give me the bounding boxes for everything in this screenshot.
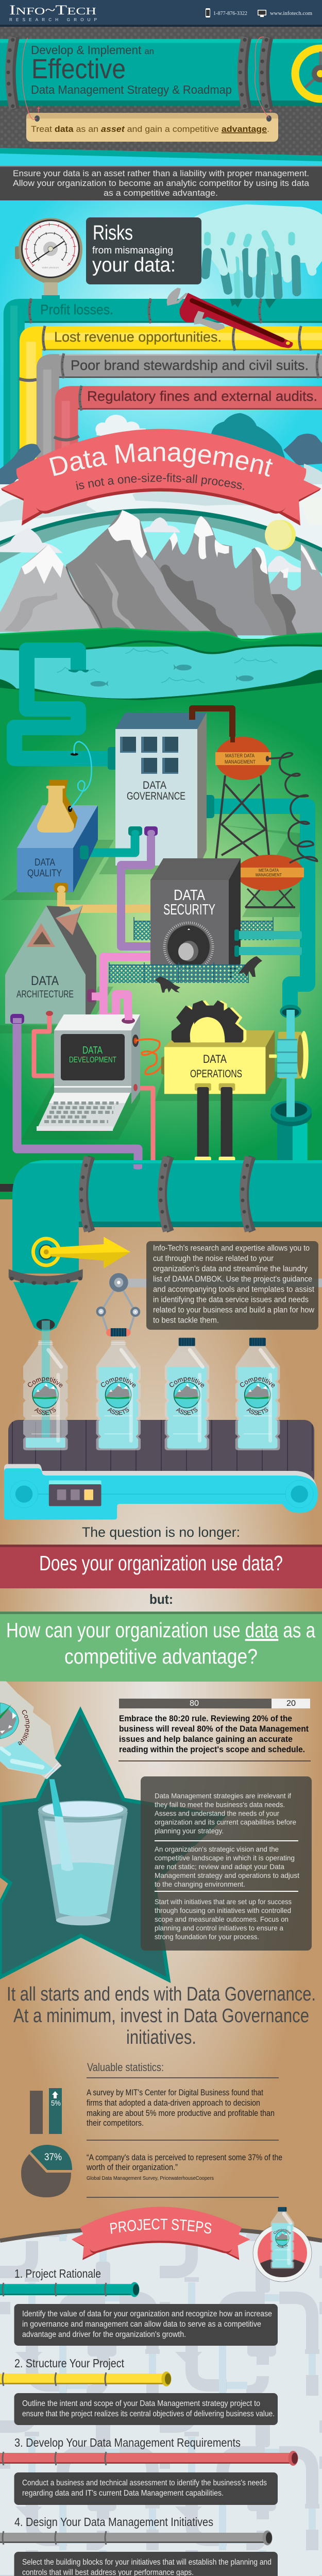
connectors: governance [128, 826, 158, 836]
label: data architecture: ARCHITECTURE [16, 989, 74, 1000]
sign text: Treat data as an asset and gain a competitive advantage. [31, 124, 269, 134]
step 1 box: Identify the value of data for your organization and recognize how an increase [22, 2310, 272, 2318]
bottle 3 label text: ASSETS [176, 1408, 198, 1415]
bar chart: 5 percent [30, 2088, 62, 2134]
gauge label: water pressure [42, 266, 59, 269]
fence: left [134, 917, 150, 940]
label: data operations: DATA [203, 1053, 227, 1065]
step 3 [0, 2436, 298, 2505]
label: data development: DATA [82, 1045, 103, 1056]
statistic: quote text [86, 2153, 282, 2181]
panel: strategy guidance: Start with initiatives that are set up for success [155, 1897, 292, 1906]
title: effective: Effective [31, 54, 126, 84]
panel: strategy guidance: to the changing environment. [155, 1880, 245, 1888]
statistics heading: Valuable statistics: [87, 2061, 164, 2074]
port: orange [132, 1035, 139, 1047]
panel: research text: and accompanying tools and templates to assist [153, 1285, 315, 1294]
step 1 box: advantage and driver for the organization's growth. [22, 2330, 186, 2339]
phone number: 1-877-876-3322 [213, 10, 247, 16]
bottle 3 label text: Competitive [170, 1377, 204, 1387]
panel: strategy guidance: scope and measurable outcomes. Focus on [155, 1915, 289, 1923]
computer: data development [37, 1012, 140, 1131]
star backdrop [0, 1710, 224, 1980]
bottle 3 label text [170, 1377, 204, 1415]
label: data security: DATA [174, 887, 206, 904]
panel: risks sky [0, 200, 322, 551]
connector: quality [80, 845, 89, 859]
block: data quality [17, 779, 98, 893]
pie chart: 37 percent: 37% [44, 2152, 62, 2163]
risk text: regulatory: Regulatory fines and external audits. [87, 388, 317, 404]
shadow tower [199, 795, 214, 818]
panel: research text: list of DAMA DMBOK. Use the project's guidance [153, 1275, 312, 1283]
step 4 pipe [0, 2531, 272, 2545]
pipe: pink to architecture [92, 992, 106, 1001]
port: salmon [133, 1084, 138, 1091]
panel: research text: organization's data and streamline the laundry [153, 1264, 308, 1273]
sign wires [22, 37, 273, 120]
bottle 2 label text: ASSETS [107, 1408, 129, 1415]
lake [0, 646, 322, 700]
medallion: bottle [252, 2207, 312, 2282]
connector: salmon [46, 1011, 53, 1016]
label: data governance: DATA [143, 779, 166, 791]
icon: guard dog right [238, 956, 262, 977]
sky clouds [0, 489, 322, 526]
banner label: PROJECT STEPS [110, 2218, 211, 2234]
pipe: yellow [19, 326, 322, 479]
risk pipes [4, 298, 322, 479]
pipe: teal [4, 298, 322, 479]
panel: strategy guidance: Assess and understand the needs of your [155, 1809, 279, 1818]
title: develop and implement: Develop & Implement an [31, 43, 154, 57]
water tower: meta data management [236, 855, 304, 907]
safe: data security [150, 858, 241, 981]
water outlet [69, 669, 89, 672]
pipes: teal outlets [234, 929, 302, 957]
80/20 rule text [119, 1714, 309, 1754]
icon: up arrow [52, 2091, 58, 2098]
step 2 box: Outline the intent and scope of your Data Management strategy project to [22, 2399, 260, 2408]
banner: data management [1, 429, 321, 526]
step 2 box [14, 2393, 278, 2425]
pipe: teal main to governance [14, 650, 109, 758]
label: data security [163, 887, 215, 918]
label: meta data management [256, 868, 282, 877]
panel: strategy guidance: organization and its current capabilities before [155, 1818, 296, 1826]
panel: strategy guidance: Management strategy and operations to adjust [155, 1871, 299, 1879]
statistic: quote text: Global Data Management Survey, PricewaterhouseCoopers [87, 2176, 214, 2181]
panel: research text: in identifying the data service issues and needs [153, 1295, 309, 1304]
intro text: Ensure your data is an asset rather than a liability with proper management. [13, 168, 309, 178]
coiled hose [266, 753, 317, 863]
statistic: survey text: A survey by MIT's Center for Digital Business found that [87, 2088, 263, 2097]
left ground strip [0, 1184, 15, 1192]
fence: right [241, 917, 273, 940]
icon: monitor [258, 10, 266, 17]
statistic: survey text: their competitors. [87, 2118, 144, 2128]
green land background [0, 639, 322, 1200]
step 1 heading: 1. Project Rationale [14, 2267, 101, 2280]
bottle 4: capped [235, 1337, 280, 1450]
upper land strip [0, 628, 322, 653]
80/20 rule text: issues and help balance gaining an accurate [119, 1734, 293, 1744]
icon: pressure gauge [15, 218, 82, 299]
panel: strategy guidance: An organization's strategic vision and the [155, 1845, 279, 1853]
label text on bottle: Competitive [18, 1710, 30, 1745]
step 1 pipe [0, 2282, 139, 2297]
panel: research text [146, 1241, 318, 1330]
step 1 box: in governance and management can allow data to serve as a competitive [22, 2320, 261, 2329]
intro text: Allow your organization to become an analytic competitor by using its data [13, 178, 310, 188]
icon: yellow valve wheel [295, 48, 322, 99]
panel: project steps background [0, 2227, 322, 2576]
panel: risks heading: your data: [92, 254, 176, 276]
dome and sky [0, 509, 322, 639]
pipe: teal to tower and right [206, 806, 308, 1007]
banner headline: Data Management [49, 443, 273, 477]
label: meta data management: META DATA [259, 868, 279, 873]
gear [172, 1001, 246, 1042]
pipe: pink patch [92, 992, 104, 1001]
icon: flask [37, 779, 78, 833]
purple pipe end [133, 1164, 142, 1170]
step 4 box: Select the building blocks for your initiatives that will establish the planning and [22, 2558, 272, 2567]
intro panel [0, 166, 322, 200]
panel: strategy guidance: are not static; review and adapt your Data [155, 1862, 284, 1871]
fence: front [109, 962, 248, 983]
title pipe shapes [0, 37, 322, 109]
valve stack [269, 1005, 312, 1175]
banner body [16, 429, 306, 512]
bottle 1 label text: ASSETS [34, 1408, 56, 1415]
label: master data management [225, 753, 256, 765]
medallion label text: ASSETS [277, 2244, 287, 2248]
risk text: profit losses: Profit losses. [40, 302, 113, 317]
water tower: master data management [215, 726, 271, 860]
panel: red question [0, 1545, 322, 1588]
step 3 box [14, 2472, 278, 2505]
pipe: brown to tower [192, 708, 232, 737]
statistic: survey text: making are about 5% more productive and profitable than [87, 2108, 275, 2118]
step 3 pipe [0, 2451, 298, 2466]
bottle 3: capped [165, 1337, 209, 1450]
panel: risks heading: Risks [93, 222, 133, 244]
label: data operations: OPERATIONS [190, 1068, 242, 1080]
storage tank pipe [12, 1157, 322, 1274]
water wedge [0, 148, 322, 166]
icon: phone [206, 8, 210, 18]
water splash [194, 205, 322, 305]
80/20 bar: 20 [286, 1699, 296, 1708]
step 2 pipe [0, 2371, 171, 2386]
icon: pouring bottle [0, 1681, 62, 1780]
label: data quality: QUALITY [27, 868, 62, 879]
question lead-in: The question is no longer: [82, 1524, 240, 1540]
machine: data operations [161, 1001, 275, 1165]
80/20 rule text: reading within the project's scope and schedule. [119, 1744, 305, 1754]
step 3 box: Conduct a business and technical assessment to identify the business's needs [22, 2479, 267, 2487]
banner: project steps [71, 2207, 250, 2260]
intro text: as a competitive advantage. [104, 188, 218, 198]
panel: strategy guidance: strong foundation for your process. [155, 1933, 259, 1941]
bottle 1: filling [23, 1320, 68, 1450]
statistic: survey text: firms that adopted a data-driven approach to decision [87, 2098, 260, 2108]
title: strategy and roadmap: Data Management Strategy & Roadmap [31, 83, 232, 96]
logo: RESEARCH GROUP [9, 18, 97, 22]
80/20 rule text: Embrace the 80:20 rule. Reviewing 20% of the [119, 1714, 292, 1723]
pipe: red [54, 386, 322, 479]
label: data operations [190, 1053, 242, 1080]
pipe: salmon right [135, 1088, 153, 1161]
bottle 4 label text: Competitive [240, 1377, 275, 1387]
port: pink [122, 1012, 135, 1024]
bottle 2 label text: Competitive [101, 1377, 136, 1387]
panel: strategy guidance [141, 1776, 312, 1951]
building: data governance [115, 713, 207, 871]
pipe: gray [37, 353, 322, 479]
bottle 2: filled [96, 1341, 141, 1450]
step 3 box: regarding data and IT's current Data Management capabilities. [22, 2489, 224, 2498]
clouds behind banner [0, 413, 322, 484]
intro text [13, 168, 310, 198]
website: www.infotech.com [270, 10, 312, 16]
bottle 2 label text [101, 1377, 136, 1415]
icon: guard dog left [155, 976, 180, 993]
connector: pink [87, 989, 95, 1002]
safe dial [164, 923, 213, 971]
bottle 4 label text [240, 1377, 275, 1415]
tan background [0, 1199, 322, 2240]
connector: quality bottom [54, 883, 68, 893]
pipe: purple long [17, 1018, 138, 1168]
panel: risks heading: from mismanaging [92, 245, 173, 256]
panel: research text: to best tackle them. [153, 1316, 219, 1325]
data governance statement [7, 1984, 316, 2048]
panel: strategy guidance: competitive landscape in which it is operating [155, 1854, 295, 1862]
ground shadows [0, 824, 314, 1140]
step 2 [0, 2357, 278, 2425]
panel: strategy guidance: Data Management strategies are irrelevant if [155, 1792, 291, 1800]
step 4 [0, 2515, 278, 2576]
bottle 4 label text: ASSETS [246, 1408, 268, 1415]
panel: research text: related to your business and build a plan for how [153, 1306, 315, 1314]
medallion label text [274, 2229, 291, 2248]
step 4 box [14, 2552, 278, 2576]
header bar [0, 0, 322, 27]
label: data architecture [16, 974, 74, 1000]
panel: green question [0, 1612, 322, 1682]
pipe: salmon left [34, 1014, 56, 1076]
label: master data management: MANAGEMENT [225, 759, 256, 765]
banner subline: is not a one-size-fits-all process. [76, 473, 244, 490]
panel: bottling line [4, 1236, 322, 1520]
panel: data management plant [0, 650, 317, 1175]
step 2 heading: 2. Structure Your Project [14, 2357, 125, 2370]
logo: INFO ~T ECH [9, 3, 96, 18]
panel: green question: competitive advantage? [64, 1645, 258, 1668]
label: data quality: DATA [35, 857, 55, 868]
connector: purple [10, 1014, 24, 1024]
filling nozzle [9, 1269, 83, 1331]
step 1 box [14, 2304, 278, 2346]
label: data development: DEVELOPMENT [69, 1056, 116, 1064]
panel: mountain landscape [0, 489, 322, 1200]
label: data governance [127, 779, 185, 802]
label: data development [69, 1045, 116, 1064]
label: data security: SECURITY [163, 902, 215, 918]
panel: risks heading [86, 217, 201, 284]
step 3 heading: 3. Develop Your Data Management Requirements [14, 2436, 241, 2449]
pipe: tan [61, 889, 155, 909]
step 2 box: ensure that the project realizes its central objectives of delivering business value. [22, 2410, 275, 2418]
icon: glass of water [38, 1779, 128, 1925]
label: data quality [27, 857, 62, 879]
pipe: purple to governance [121, 832, 155, 946]
icon: pipe wrench [167, 287, 293, 348]
bottle 1 label text [28, 1377, 63, 1415]
conveyor machine [4, 1464, 318, 1519]
label: master data management: MASTER DATA [225, 753, 255, 759]
pipe: pink [104, 957, 155, 1018]
conveyor belt [8, 1420, 314, 1487]
data governance statement: initiatives. [126, 2027, 196, 2048]
wire: orange [135, 1039, 162, 1074]
panel: research text: Info-Tech's research and expertise allows you to [153, 1244, 310, 1252]
bar chart: 5 percent: 5% [51, 2099, 61, 2108]
tank flanges [82, 1157, 252, 1231]
keyboard keys [44, 1103, 118, 1122]
80/20 rule text: business will reveal 80% of the Data Management [119, 1724, 309, 1734]
label: data governance: GOVERNANCE [127, 790, 185, 802]
panel: green question: How can your organization use data as a [6, 1618, 315, 1642]
mountains [0, 510, 322, 637]
step 4 heading: 4. Design Your Data Management Initiatives [14, 2515, 213, 2529]
statistic: survey text [87, 2088, 275, 2128]
statistic: quote text: worth of their organization.” [86, 2162, 178, 2172]
label: meta data management: MANAGEMENT [256, 872, 282, 877]
panel: strategy guidance: planning your strategy. [155, 1827, 224, 1835]
bottle 1 label text: Competitive [28, 1377, 63, 1387]
statistic: quote text: “A company's data is perceived to represent some 37% of the [87, 2153, 282, 2162]
hanging sign [26, 113, 278, 142]
label: data architecture: DATA [31, 974, 59, 988]
panel: strategy guidance: planning and control initiatives to ensure a [155, 1924, 283, 1932]
risk text: lost revenue: Lost revenue opportunities. [54, 329, 222, 345]
banner tails [1, 479, 321, 526]
connector: teal [108, 747, 117, 770]
icon: yellow arrow valve [31, 1237, 130, 1268]
wire: cyan [70, 741, 92, 809]
building: data architecture [5, 905, 96, 1024]
robot arm [96, 1273, 322, 1336]
80/20 bar: 80 [190, 1699, 199, 1708]
panel: strategy guidance: they fail to meet the business's data needs. [155, 1801, 285, 1809]
panel: strategy guidance: through focusing on initiatives with controlled [155, 1906, 291, 1914]
hero band: title pipe [0, 27, 322, 156]
risk text: poor brand: Poor brand stewardship and civil suits. [71, 358, 309, 373]
medallion label text: Competitive [274, 2229, 291, 2234]
logo [9, 3, 97, 22]
but label: but: [149, 1591, 173, 1607]
pie chart: 37 percent [21, 2145, 72, 2197]
pipe: teal quality to governance [85, 832, 135, 853]
80/20 bar [119, 1699, 310, 1708]
panel: research text: cut through the noise related to your [153, 1254, 274, 1263]
step 1 [0, 2267, 278, 2346]
